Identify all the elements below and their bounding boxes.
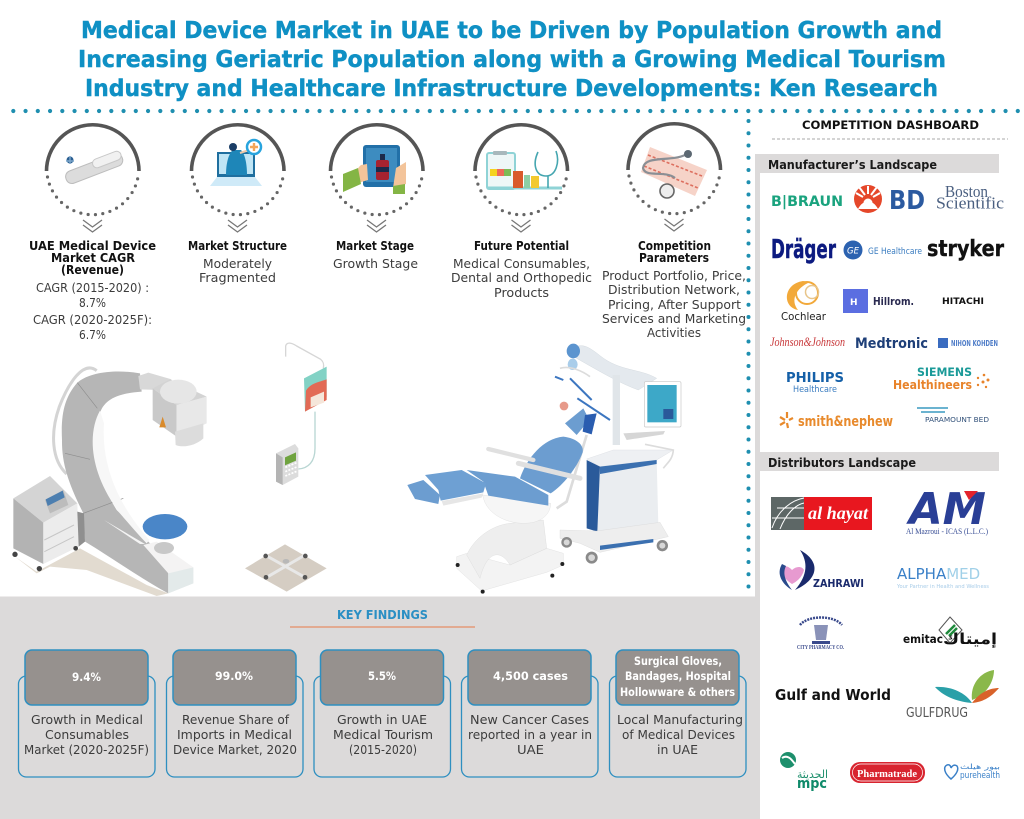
heading: manufacturer's landscape: Manufacturer’s Landscape: [768, 157, 937, 172]
logo: Hillrom: Hillrom.: [873, 296, 914, 308]
logo: Pharmatrade: [850, 762, 925, 783]
logo: Hitachi: HITACHI: [942, 297, 984, 307]
panel: market overview column 1: [29, 125, 156, 342]
logo: BD: BD: [889, 186, 925, 216]
icon: ECG strip with stethoscope in ring: [628, 124, 720, 231]
logo: B Braun: B|BRAUN: [771, 194, 843, 210]
heading: UAE Medical Device Market CAGR: (Revenue): [61, 263, 124, 277]
card: revenue share of imports: 99.0%: [215, 669, 253, 683]
heading: competition parameters: Competition: [638, 239, 711, 253]
heading: market stage: Market Stage: [336, 239, 414, 253]
heading: UAE Medical Device Market CAGR: [29, 239, 156, 277]
logo: Medtronic: Medtronic: [855, 336, 928, 352]
title: Industry and Healthcare Infrastructure Developments: Ken Research: [85, 76, 938, 102]
card: local manufacturing: of Medical Devices: [622, 727, 735, 742]
panel: manufacturer's landscape: [755, 154, 1004, 430]
illustration: IV bag and infusion pump: [245, 343, 327, 592]
text: medical consumables products: [451, 256, 592, 300]
text: CAGR values: CAGR (2015-2020) :: [36, 280, 149, 295]
logo: Siemens Healthineers: [893, 365, 990, 392]
card: local manufacturing: [610, 650, 746, 777]
text: competition parameters list: [602, 268, 746, 340]
heading: market structure: Market Structure: [188, 239, 287, 253]
logo: Emitac: emitac: [903, 632, 943, 646]
card: medical tourism growth: Growth in UAE: [337, 712, 427, 727]
text: competition parameters list: Pricing, After Support: [608, 297, 741, 312]
text: CAGR values: 8.7%: [79, 295, 106, 310]
panel: future potential column 4: [451, 125, 592, 300]
logo: Al Mazroui ICAS: AM: [906, 484, 986, 535]
logo: Paramount Bed: PARAMOUNT BED: [925, 416, 989, 424]
card: medical tourism growth: (2015-2020): [349, 742, 417, 757]
title: [78, 18, 946, 102]
title: Increasing Geriatric Population along with a Growing Medical Tourism: [78, 47, 946, 73]
logo: PureHealth: بيور هيلث: [960, 763, 1000, 771]
logo: Boston Scientific: Boston: [945, 182, 988, 201]
logo: Zahrawi: [780, 550, 864, 590]
logo: Siemens Healthineers: Healthineers: [893, 377, 972, 392]
illustration: dental chair with cart: [407, 344, 681, 594]
text: competition parameters list: Distribution Network,: [608, 282, 740, 297]
logo: Boston Scientific: [936, 182, 1004, 212]
logo: Nihon Kohden: NIHON KOHDEN: [951, 339, 998, 348]
logo: Philips Healthcare: PHILIPS: [786, 370, 844, 386]
heading: UAE Medical Device Market CAGR: UAE Medical Device: [29, 239, 156, 253]
logo: Smith & Nephew: smith&nephew: [798, 414, 893, 430]
logo: Nihon Kohden: [938, 338, 998, 348]
heading: competition parameters: [638, 239, 711, 265]
heading: UAE Medical Device Market CAGR: Market CAGR: [51, 251, 135, 265]
heading: key findings: KEY FINDINGS: [337, 607, 428, 622]
card: medical consumables growth: [18, 650, 155, 777]
logo: Philips Healthcare: [786, 370, 844, 395]
heading: competition dashboard: COMPETITION DASHBOARD: [802, 118, 979, 132]
logo: MPC: الحديثة: [797, 768, 828, 781]
card: medical consumables growth: Growth in Medical: [31, 712, 143, 727]
logo: Philips Healthcare: Healthcare: [793, 385, 837, 395]
logo: Gulf and World: Gulf and World: [775, 686, 891, 704]
panel: market structure column 2: [188, 125, 287, 285]
logo: Siemens Healthineers: SIEMENS: [917, 365, 972, 379]
text: CAGR values: CAGR (2020-2025F):: [33, 312, 152, 327]
text: CAGR values: 6.7%: [79, 327, 106, 342]
logo: al hayat: [771, 497, 872, 530]
logo: Smith & Nephew: [780, 412, 893, 430]
card: new cancer cases: reported in a year in: [468, 727, 592, 742]
card: medical tourism growth: 5.5%: [368, 669, 396, 683]
text: moderately fragmented: Moderately: [203, 256, 273, 271]
card: medical consumables growth: 9.4%: [72, 670, 101, 684]
panel: competition parameters column 5: [602, 124, 746, 340]
card: medical consumables growth: Consumables: [45, 727, 129, 742]
logo: GE Healthcare: GE Healthcare: [868, 247, 922, 257]
heading: distributors landscape: Distributors Landscape: [768, 455, 916, 470]
heading: competition parameters: Parameters: [639, 251, 709, 265]
text: medical consumables products: Products: [494, 285, 549, 300]
card: medical tourism growth: [314, 650, 450, 777]
heading: distributors landscape: [755, 452, 999, 471]
text: competition parameters list: Product Portfolio, Price,: [602, 268, 746, 283]
text: medical consumables products: Medical Consumables,: [453, 256, 590, 271]
icon: medical device pen in ring: [46, 125, 139, 232]
text: CAGR values: [33, 280, 152, 342]
logo: Hillrom: H: [850, 298, 858, 308]
logo: Gulfdrug: GULFDRUG: [906, 706, 968, 721]
logo: Zahrawi: ZAHRAWI: [813, 577, 864, 590]
card: new cancer cases: New Cancer Cases: [470, 712, 589, 727]
logo: MPC: [780, 752, 828, 792]
panel: market stage column 3: [330, 125, 423, 271]
panel: key findings background: [0, 596, 760, 819]
logo: Cochlear: Cochlear: [781, 311, 827, 323]
card: new cancer cases: [462, 650, 598, 777]
card: medical consumables growth: Market (2020-2025F): [24, 742, 149, 757]
logo: Paramount Bed: [917, 408, 989, 424]
card: revenue share of imports: [166, 650, 303, 777]
card: revenue share of imports: Revenue Share of: [182, 712, 290, 727]
icon: clipboard and stethoscope in ring: [475, 125, 568, 232]
text: growth stage: Growth Stage: [333, 256, 418, 271]
logo: PureHealth: purehealth: [960, 771, 1000, 781]
logo: PureHealth: [945, 763, 1000, 781]
logo: Al Mazroui ICAS: Al Mazroui - ICAS (L.L.C.): [906, 526, 988, 536]
logo: BD: [854, 185, 925, 216]
heading: manufacturer's landscape: [755, 154, 999, 173]
card: new cancer cases: UAE: [517, 742, 544, 757]
logo: Gulfdrug: [906, 670, 999, 721]
text: competition parameters list: Services and Marketing: [602, 311, 746, 326]
logo: Johnson & Johnson: Johnson&Johnson: [770, 335, 845, 349]
logo: GE Healthcare: [844, 240, 922, 260]
card: new cancer cases: 4,500 cases: [493, 669, 568, 683]
logo: Alphamed: Your Partner in Health and Wellness: [896, 584, 989, 590]
logo: MPC: mpc: [797, 776, 827, 792]
card: local manufacturing: Hollowware & others: [620, 685, 735, 699]
card: local manufacturing: Bandages, Hospital: [625, 669, 731, 683]
card: local manufacturing: Local Manufacturing: [617, 712, 743, 727]
icon: tablet with bottle in ring: [330, 125, 423, 232]
heading: future potential: Future Potential: [474, 239, 569, 253]
illustration: C-arm imaging machine: [12, 368, 207, 596]
logo: Hillrom: [843, 289, 914, 313]
logo: Drager: Dräger: [771, 235, 836, 265]
logo: stryker: stryker: [927, 237, 1004, 262]
logo: Emitac: [903, 617, 997, 648]
card: revenue share of imports: Imports in Medical: [177, 727, 292, 742]
logo: Alphamed: ALPHAMED: [897, 565, 980, 583]
logo: City Pharmacy: [797, 618, 844, 651]
logo: Boston Scientific: Scientific: [936, 194, 1004, 212]
card: local manufacturing: in UAE: [657, 742, 698, 757]
text: moderately fragmented: Fragmented: [199, 270, 276, 285]
logo: Alphamed: [896, 565, 989, 590]
text: medical consumables products: Dental and Orthopedic: [451, 270, 592, 285]
logo: Emitac: إميتاك: [943, 630, 997, 648]
text: moderately fragmented: [199, 256, 276, 285]
card: local manufacturing: Surgical Gloves,: [634, 654, 722, 668]
logo: GE Healthcare: GE: [847, 246, 859, 256]
panel: distributors landscape: [755, 452, 1000, 792]
title: Medical Device Market in UAE to be Driven by Population Growth and: [81, 18, 942, 44]
logo: City Pharmacy: CITY PHARMACY CO.: [797, 645, 844, 651]
icon: doctor on laptop in ring: [192, 125, 284, 232]
text: competition parameters list: Activities: [647, 325, 701, 340]
logo: Cochlear: [781, 281, 827, 323]
logo: Pharmatrade: Pharmatrade: [857, 769, 918, 780]
logo: al hayat: al hayat: [808, 503, 869, 523]
card: revenue share of imports: Device Market, 2020: [173, 742, 297, 757]
card: medical tourism growth: Medical Tourism: [333, 727, 433, 742]
